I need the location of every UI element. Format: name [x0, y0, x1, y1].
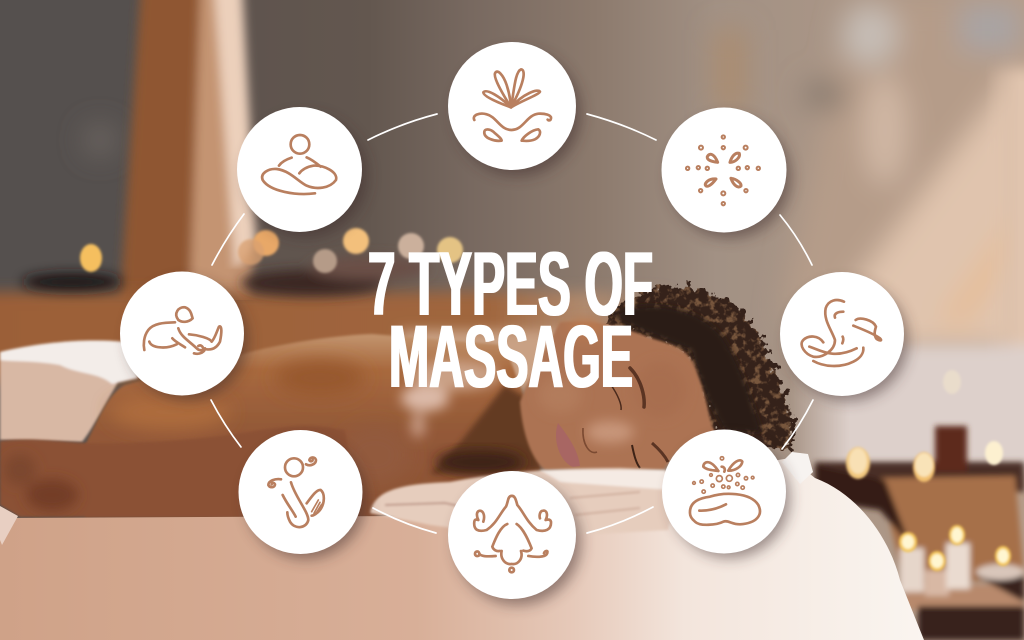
circle: meditating figure icon [237, 107, 362, 232]
shelf [0, 292, 680, 382]
massage table sheet [0, 452, 924, 640]
client arm [0, 426, 360, 517]
hair [606, 285, 794, 451]
ear and face lights [538, 319, 686, 443]
blurred wall tones [84, 0, 1024, 350]
circle: reclining figure icon [120, 272, 244, 396]
back colour patches [110, 360, 410, 485]
title [368, 234, 653, 406]
elbow shading [4, 454, 78, 511]
icon: meditating person [262, 135, 336, 194]
blurred curtain drape [120, 0, 256, 300]
title: MASSAGE [389, 306, 633, 406]
bokeh candle lights [80, 228, 463, 273]
candle flames [899, 525, 1011, 571]
icon: lotus [474, 69, 551, 141]
circle shadows [128, 50, 908, 605]
neck shadow [430, 385, 542, 474]
connector arcs [211, 114, 813, 533]
circle: seated figure icon [448, 471, 576, 599]
circle: flower and wave icon [448, 42, 576, 170]
circle: dots and drops icon [662, 108, 786, 232]
title: 7 TYPES OF [368, 234, 653, 335]
white towel, left [0, 340, 138, 442]
icon: reclining figure and hand [268, 457, 324, 527]
icon: body from above [474, 496, 551, 572]
blurred shelf details and dark trays [22, 256, 600, 390]
shoulder highlight [401, 360, 500, 438]
circle: stone and sparkle icon [662, 430, 786, 554]
pale wall, right side [790, 70, 1024, 470]
lips, eyebrow and eyelashes [556, 368, 668, 468]
icon: profile with leaf [802, 300, 881, 366]
client back and shoulder [85, 334, 540, 517]
folded towel under head [370, 468, 680, 534]
hair inner shadow [612, 305, 762, 432]
icon: burst of dots [686, 135, 760, 205]
face [520, 322, 716, 470]
icon: hot stone with bubbles [690, 457, 760, 525]
circle: figure with swirls icon [238, 430, 362, 554]
neck dark crease [436, 450, 524, 474]
upper bokeh lights [846, 370, 1003, 482]
table top and wood stump [815, 426, 1024, 640]
circle: head and leaf icon [780, 272, 904, 396]
icon: figure stretching [144, 307, 221, 354]
table with candles, lower right [815, 370, 1024, 640]
